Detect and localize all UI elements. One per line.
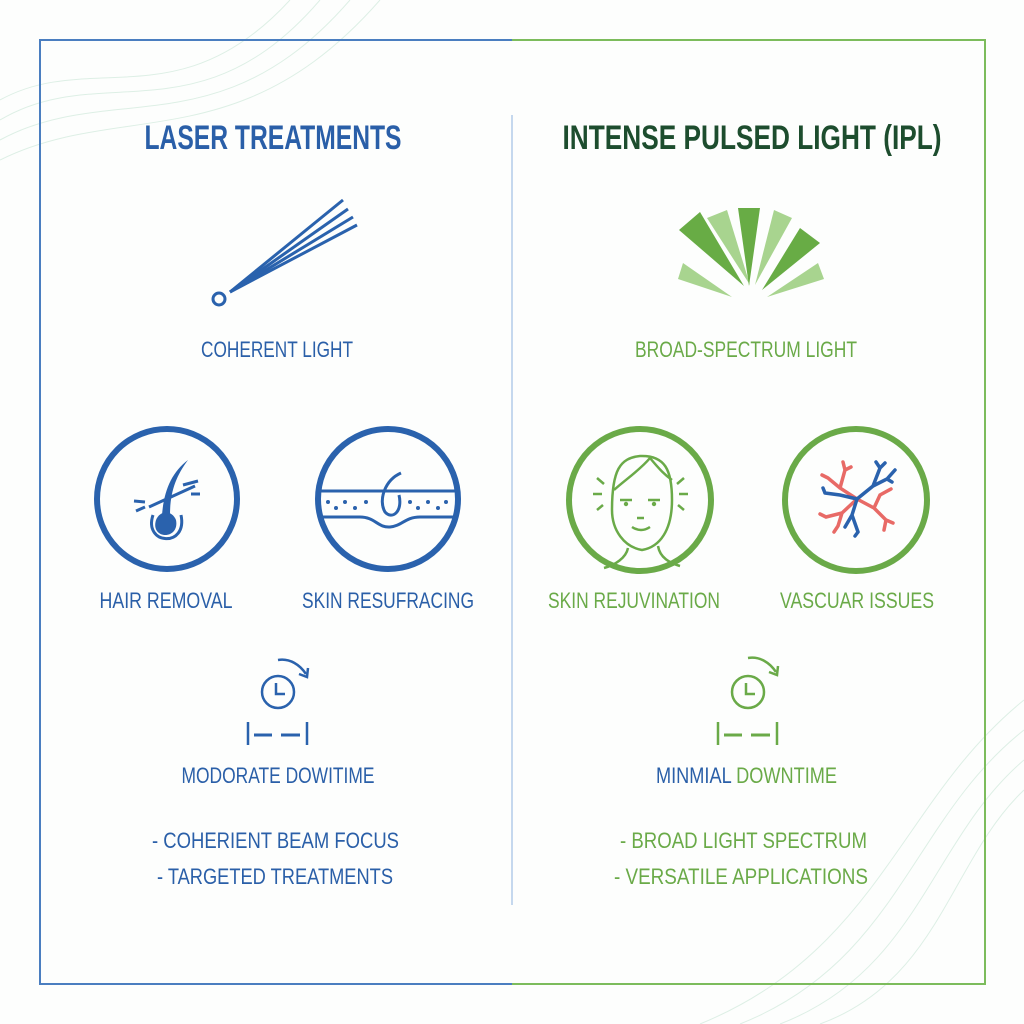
label: broad-spectrum light: BROAD-SPECTRUM LIGHT [635,337,857,362]
label: coherent light: COHERENT LIGHT [201,337,353,362]
icon: clock left [248,660,308,745]
bullets: laser [152,828,399,889]
bullets: laser: - COHERIENT BEAM FOCUS [152,828,399,853]
label: vascular issues: VASCUAR ISSUES [780,588,934,613]
icon: hair removal [97,429,237,569]
bullets: IPL: - BROAD LIGHT SPECTRUM [620,828,867,853]
label: moderate downtime: MODORATE DOWITIME [182,763,374,788]
bullets: IPL: - VERSATILE APPLICATIONS [614,864,868,889]
label: minimal downtime: MINMIAL DOWNTIME [656,763,837,788]
label: skin rejuvination: SKIN REJUVINATION [548,588,720,613]
title: laser treatments: LASER TREATMENTS [144,119,402,157]
label: hair removal: HAIR REMOVAL [100,588,232,613]
icon: vascular [785,429,927,571]
bullets: laser: - TARGETED TREATMENTS [157,864,393,889]
icon: coherent laser [213,200,357,305]
label: skin resurfacing: SKIN RESUFRACING [302,588,474,613]
icon: broad spectrum fan [678,208,824,297]
bullets: IPL [614,828,868,889]
icon: skin resurfacing [318,429,458,569]
icon: face rejuvenation [569,429,711,571]
icon: clock right [718,658,778,745]
